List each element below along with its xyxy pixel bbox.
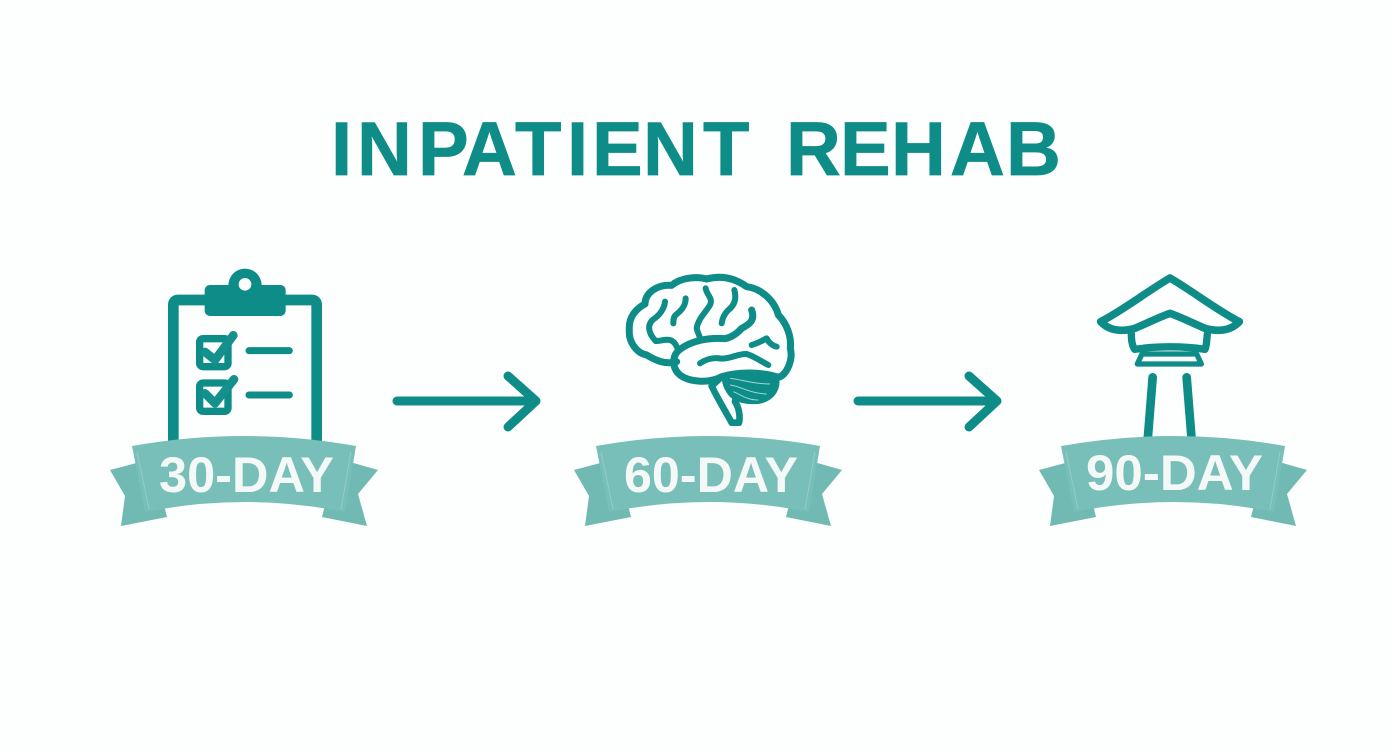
banner: 60-day <box>574 436 842 526</box>
banner: 30-day: 30-DAY <box>159 447 334 503</box>
step: 30-day <box>110 269 378 526</box>
icon: pillar <box>1101 278 1239 440</box>
arrow: 30-day to 60-day <box>397 376 536 427</box>
step: 60-day <box>574 277 842 526</box>
arrow: 60-day to 90-day <box>858 376 997 427</box>
title: INPATIENT REHAB <box>331 107 1061 192</box>
banner: 30-day <box>110 436 378 526</box>
icon: clipboard checklist <box>173 269 317 440</box>
banner: 90-day <box>1039 436 1307 526</box>
step: 90-day <box>1039 278 1307 526</box>
icon: brain <box>629 277 791 423</box>
banner: 60-day: 60-DAY <box>624 447 798 503</box>
banner: 90-day: 90-DAY <box>1086 445 1263 501</box>
